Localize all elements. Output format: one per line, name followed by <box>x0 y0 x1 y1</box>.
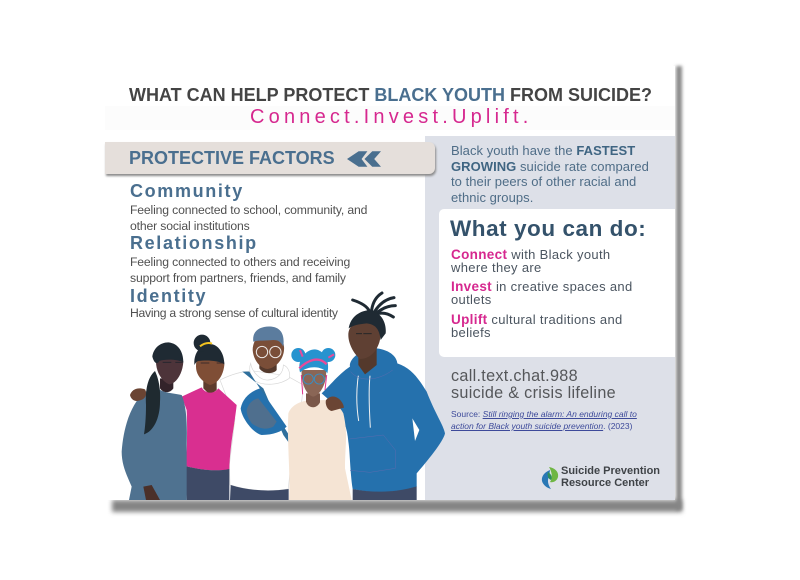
statistic text: GROWING suicide rate compared <box>451 159 649 174</box>
statistic text: to their peers of other racial and <box>451 174 636 189</box>
subtitle band <box>105 106 675 130</box>
source citation: action for Black youth suicide prevention. (2023) <box>451 421 632 431</box>
source citation <box>451 409 637 431</box>
title: WHAT CAN HELP PROTECT BLACK YOUTH FROM SUICIDE? <box>129 85 652 105</box>
card shadow right <box>676 66 682 510</box>
panel: right column <box>425 136 675 500</box>
action: invest: Invest in creative spaces and <box>451 279 633 294</box>
icon: double chevrons <box>347 151 381 167</box>
statistic text: ethnic groups. <box>451 190 533 205</box>
person: far left in blue-gray sweater <box>122 342 187 500</box>
action: connect: where they are <box>451 260 542 275</box>
what you can do heading: What you can do: <box>450 216 646 241</box>
action: connect <box>451 247 610 275</box>
text: community <box>130 203 367 233</box>
protective factors banner <box>105 142 435 174</box>
text: identity: Having a strong sense of cultural identity <box>130 306 338 320</box>
action: connect: Connect with Black youth <box>451 247 610 262</box>
action: invest <box>451 279 633 307</box>
logo text: Suicide Prevention <box>561 465 660 477</box>
action: uplift <box>451 312 623 340</box>
statistic text: Black youth have the FASTEST <box>451 143 635 158</box>
action: invest: outlets <box>451 292 492 307</box>
text: relationship: Feeling connected to others and receiving <box>130 255 350 269</box>
text: community: other social institutions <box>130 219 250 233</box>
statistic text <box>451 143 649 205</box>
card shadow bottom <box>112 500 682 512</box>
panel: what you can do <box>439 209 675 357</box>
text: community: Feeling connected to school, community, and <box>130 203 367 217</box>
text: relationship <box>130 255 350 285</box>
lifeline text: suicide & crisis lifeline <box>451 384 616 402</box>
person: center in white hoodie <box>220 327 303 500</box>
heading: relationship: Relationship <box>130 233 258 253</box>
person: second from left in pink <box>182 335 237 500</box>
person: far right in blue hoodie <box>322 293 445 500</box>
source citation: Source: Still ringing the alarm: An enduring call to <box>451 409 637 419</box>
lifeline text: call.text.chat.988 <box>451 367 578 385</box>
action: uplift: beliefs <box>451 325 491 340</box>
heading: community: Community <box>130 181 244 201</box>
banner heading: PROTECTIVE FACTORS <box>129 148 335 168</box>
text: relationship: support from partners, friends, and family <box>130 271 346 285</box>
logo text: Resource Center <box>561 476 649 488</box>
lifeline text <box>451 367 616 402</box>
illustration: group of five youth <box>122 291 445 500</box>
person: fourth in cream top <box>288 348 352 500</box>
subtitle: Connect.Invest.Uplift. <box>250 106 532 128</box>
logo icon <box>542 467 558 489</box>
logo text <box>561 465 660 488</box>
card background <box>105 66 675 500</box>
heading: identity: Identity <box>130 286 207 306</box>
action: uplift: Uplift cultural traditions and <box>451 312 623 327</box>
